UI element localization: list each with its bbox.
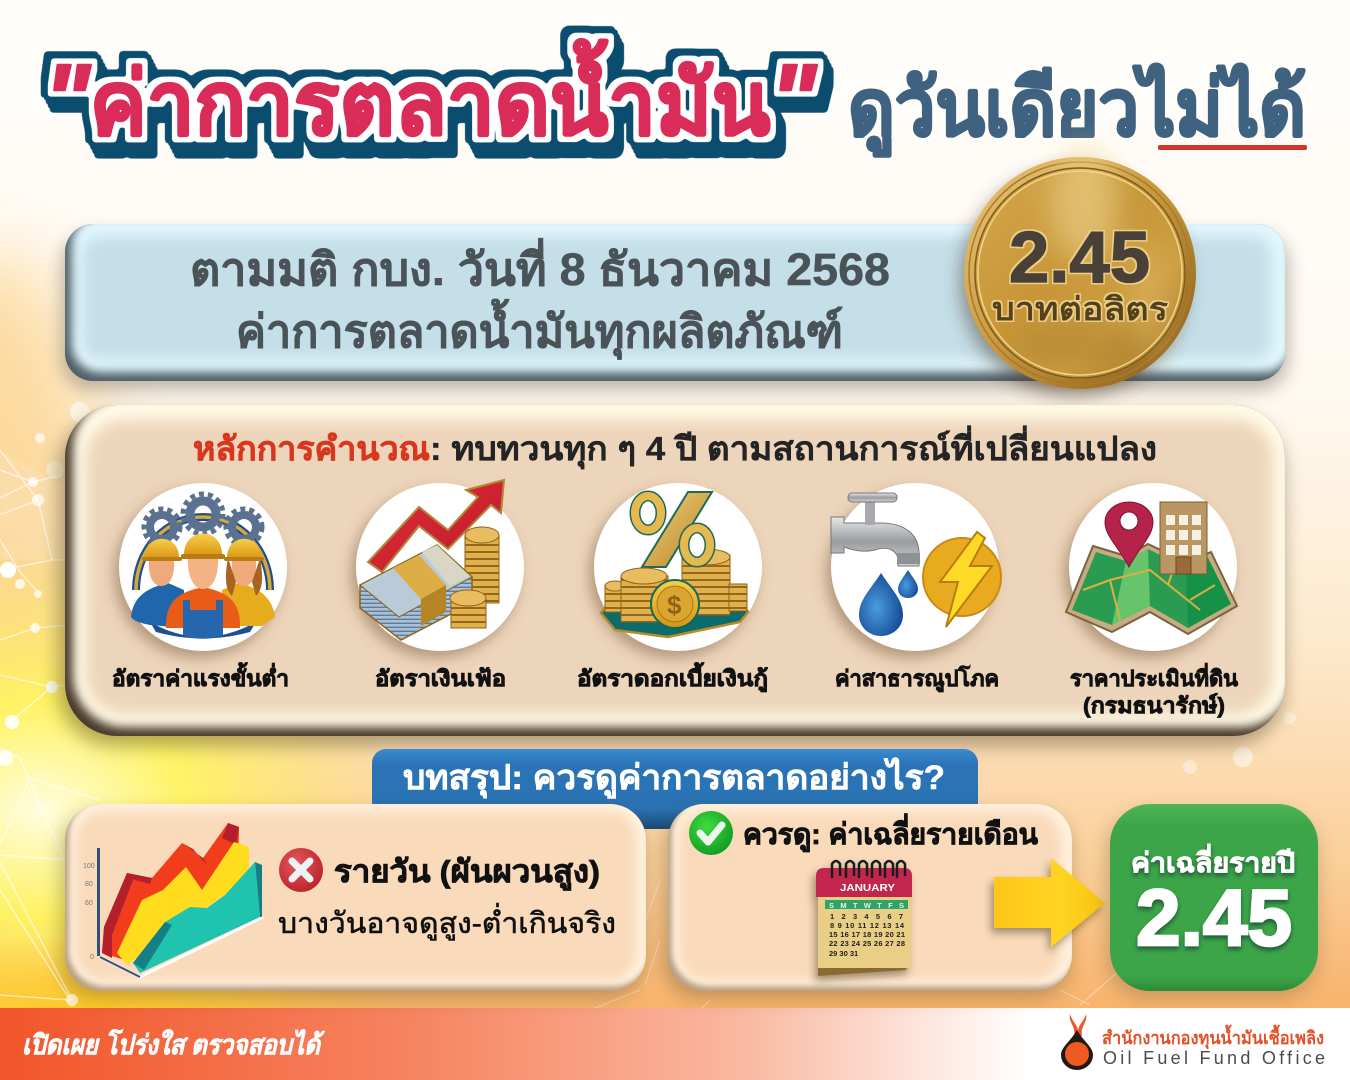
icon: calendar: JANUARY: [840, 882, 895, 894]
monthly heading: ควรดู: ค่าเฉลี่ยรายเดือน: [743, 813, 1038, 852]
chart: 3D volatile area chart: 0: [90, 954, 94, 961]
logo: Oil Fuel Fund Office: [1061, 1014, 1325, 1070]
heading: principle: : ทบทวนทุก ๆ 4 ปี ตามสถานการณ์ที่เปลี่ยนแปลง: [430, 425, 1157, 470]
label: land appraisal: ราคาประเมินที่ดิน: [1070, 662, 1238, 691]
chart: 3D volatile area chart: [83, 823, 263, 977]
title: highlighted phrase: "ค่าการตลาดน้ำมัน": [44, 39, 818, 156]
panel: monthly: [663, 799, 1076, 998]
coin value: 2.45: [1009, 218, 1150, 298]
footer band: [0, 1008, 1350, 1080]
icon: utilities: [831, 483, 1001, 651]
chart: 3D volatile area chart: 80: [85, 881, 93, 888]
icon: interest rate: $: [667, 590, 682, 620]
logo: Oil Fuel Fund Office: Oil Fuel Fund Office: [1103, 1048, 1325, 1068]
icon: calendar: 29 30 31: [829, 949, 858, 958]
heading: principle: [193, 425, 1157, 470]
icon: interest rate: [594, 483, 762, 651]
resolution line 2: ค่าการตลาดน้ำมันทุกผลิตภัณฑ์: [236, 298, 843, 360]
panel: daily: [60, 799, 650, 998]
daily description: บางวันอาจดูสูง-ต่ำเกินจริง: [278, 903, 616, 941]
heading: principle: หลักการคำนวณ: [193, 430, 430, 467]
icon: calendar: [816, 861, 912, 976]
panel: resolution: [62, 216, 1292, 390]
icon: inflation: [356, 480, 524, 651]
icon: calendar: S M T W T F S: [829, 901, 904, 910]
percent sign: [635, 492, 730, 615]
icon: check: [689, 811, 733, 855]
icon: calendar: 8 9 10 11 12 13 14: [830, 921, 905, 930]
icon: cross: [279, 848, 323, 892]
icon: land map: [1066, 483, 1237, 651]
label: inflation: อัตราเงินเฟ้อ: [375, 666, 506, 691]
panel: yearly average: [1106, 804, 1318, 998]
chart: 3D volatile area chart: 60: [85, 900, 93, 907]
footer slogan: เปิดเผย โปร่งใส ตรวจสอบได้: [22, 1028, 325, 1060]
logo: Oil Fuel Fund Office: สำนักงานกองทุนน้ำมันเชื้อเพลิง: [1102, 1024, 1324, 1050]
label: utilities: ค่าสาธารณูปโภค: [835, 665, 999, 693]
conclusion heading: บทสรุป: ควรดูค่าการตลาดอย่างไร?: [403, 757, 945, 799]
label: loan interest: อัตราดอกเบี้ยเงินกู้: [577, 662, 768, 693]
panel: calculation principles: [58, 396, 1293, 746]
chart: 3D volatile area chart: 100: [83, 863, 95, 870]
label: minimum wage: อัตราค่าแรงขั้นต่ำ: [112, 662, 289, 691]
gold coin badge: [960, 145, 1196, 396]
icon: calendar: 22 23 24 25 26 27 28: [829, 939, 905, 948]
icon: calendar: 15 16 17 18 19 20 21: [829, 930, 905, 939]
yearly heading: ค่าเฉลี่ยรายปี: [1131, 843, 1295, 878]
label: treasury department: (กรมธนารักษ์): [1083, 693, 1225, 718]
icon: calendar: 1 2 3 4 5 6 7: [830, 912, 903, 921]
yearly value: 2.45: [1136, 873, 1292, 962]
resolution line 1: ตามมติ กบง. วันที่ 8 ธันวาคม 2568: [190, 238, 890, 295]
arrow: [994, 858, 1105, 947]
icon: workers: [119, 483, 287, 651]
title underline: [1158, 145, 1307, 150]
title: second phrase: ดูวันเดียวไม่ได้: [848, 63, 1306, 157]
coin unit: บาทต่อลิตร: [992, 291, 1168, 327]
conclusion tab: [372, 749, 978, 829]
daily heading: รายวัน (ผันผวนสูง): [334, 854, 600, 891]
